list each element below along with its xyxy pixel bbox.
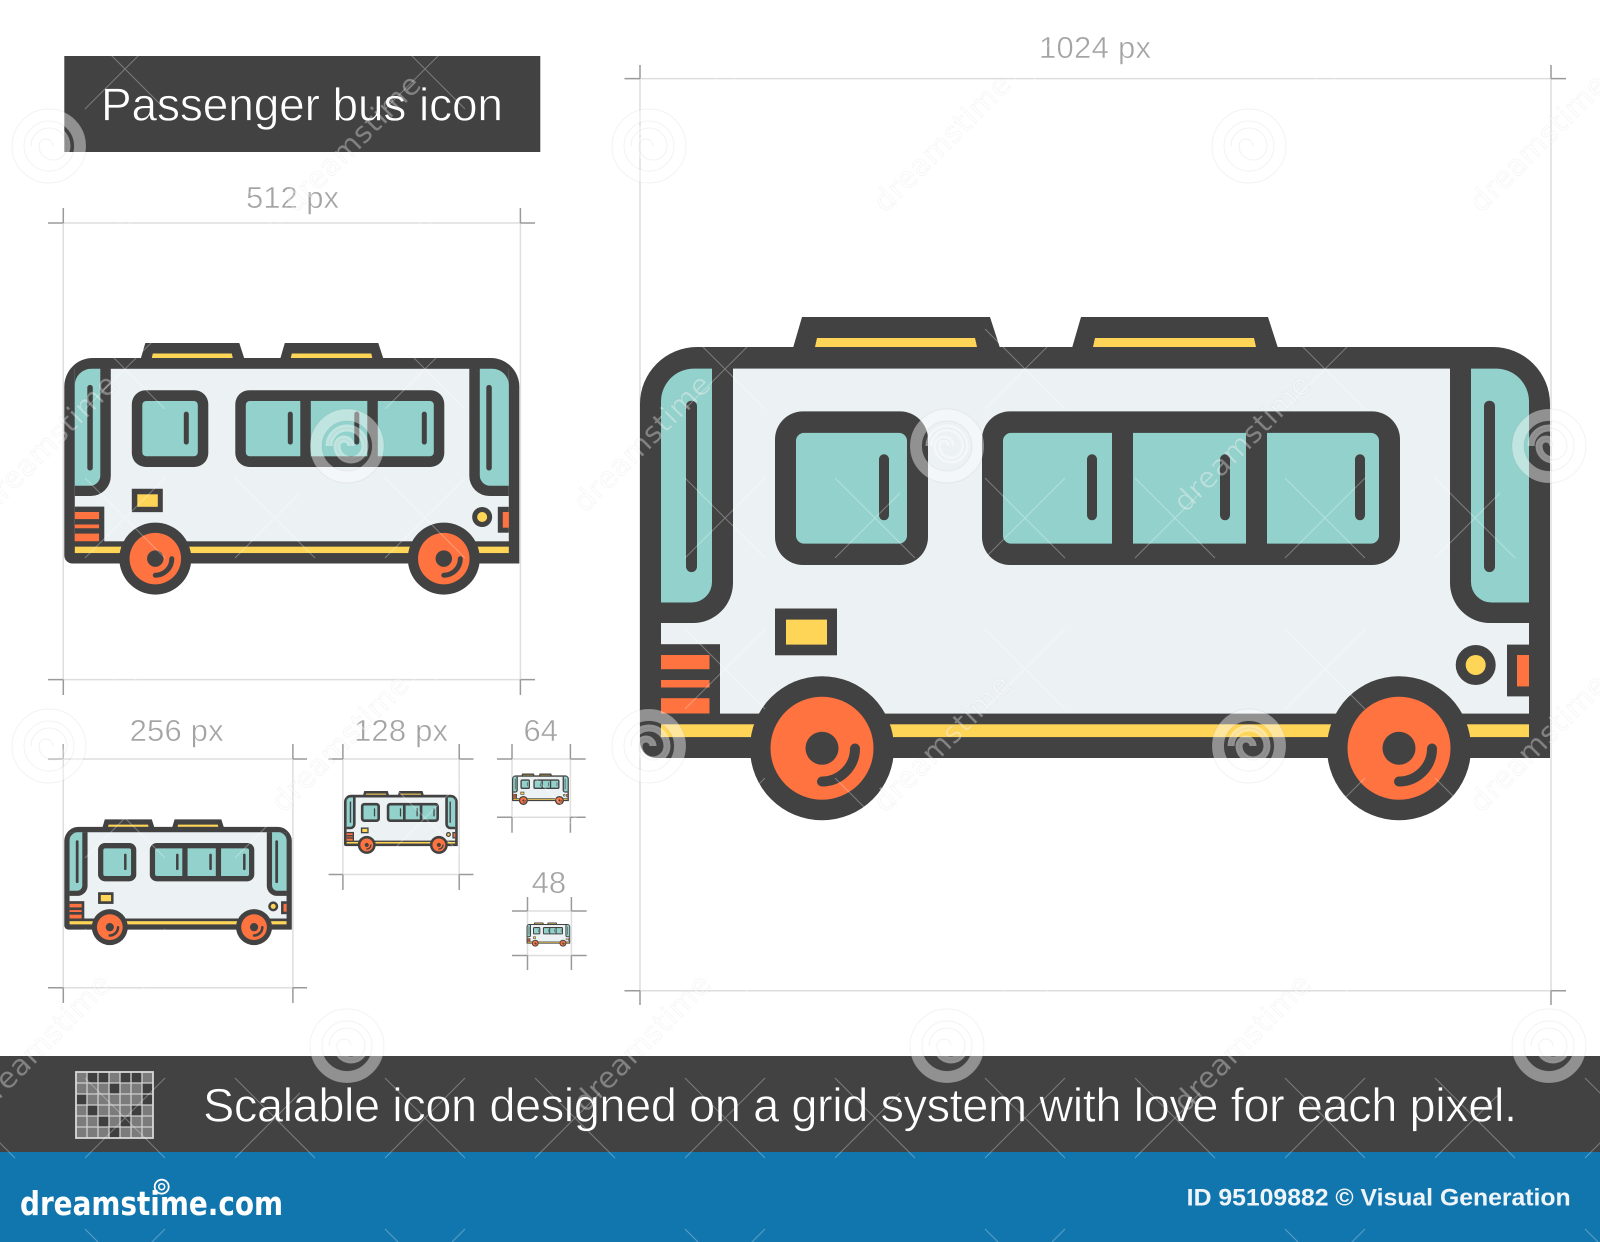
logo: dreamstime.com: dreamstime.com [20,1184,283,1223]
icon: bus 512 px [64,343,519,595]
banner text: Scalable icon designed on a grid system with love for each pixel. [203,1078,1517,1132]
watermark overlay: dreamstime [566,967,718,1119]
watermark overlay: dreamstime [1166,967,1318,1119]
icon: bus 128 px [344,791,458,854]
size guide: 48 [512,865,587,970]
size guide: 256 px: 256 px [130,713,224,748]
size guide: 512 px [48,180,535,695]
icon: pixel grid [76,1072,153,1138]
size guide: 48: 48 [532,865,566,900]
size guide: 1024 px: 1024 px [1039,30,1152,65]
watermark overlay: dreamstime [866,67,1018,219]
watermark overlay: dreamstime [566,367,718,519]
icon: bus 64 px [512,774,569,805]
watermark overlay: dreamstime [866,667,1018,819]
footer bar [0,1152,1600,1242]
watermark overlay: dreamstime [1166,367,1318,519]
icon: bus 1024 px [640,317,1550,820]
size guide: 128 px: 128 px [354,713,448,748]
size guide: 128 px [329,713,474,890]
icon: bus 256 px [64,819,292,945]
size guide: 256 px [48,713,307,1003]
icon: bus 48 px [527,923,570,947]
title banner: Passenger bus icon [101,78,503,130]
size guide: 64 [497,713,586,833]
watermark overlay: dreamstime [276,67,428,219]
title banner [64,56,540,152]
size guide: 512 px: 512 px [246,180,340,215]
watermark overlay: dreamstime [264,667,416,819]
grid system banner [0,1056,1600,1152]
image ID and credit: ID 95109882 © Visual Generation [1187,1185,1571,1212]
size guide: 64: 64 [524,713,558,748]
